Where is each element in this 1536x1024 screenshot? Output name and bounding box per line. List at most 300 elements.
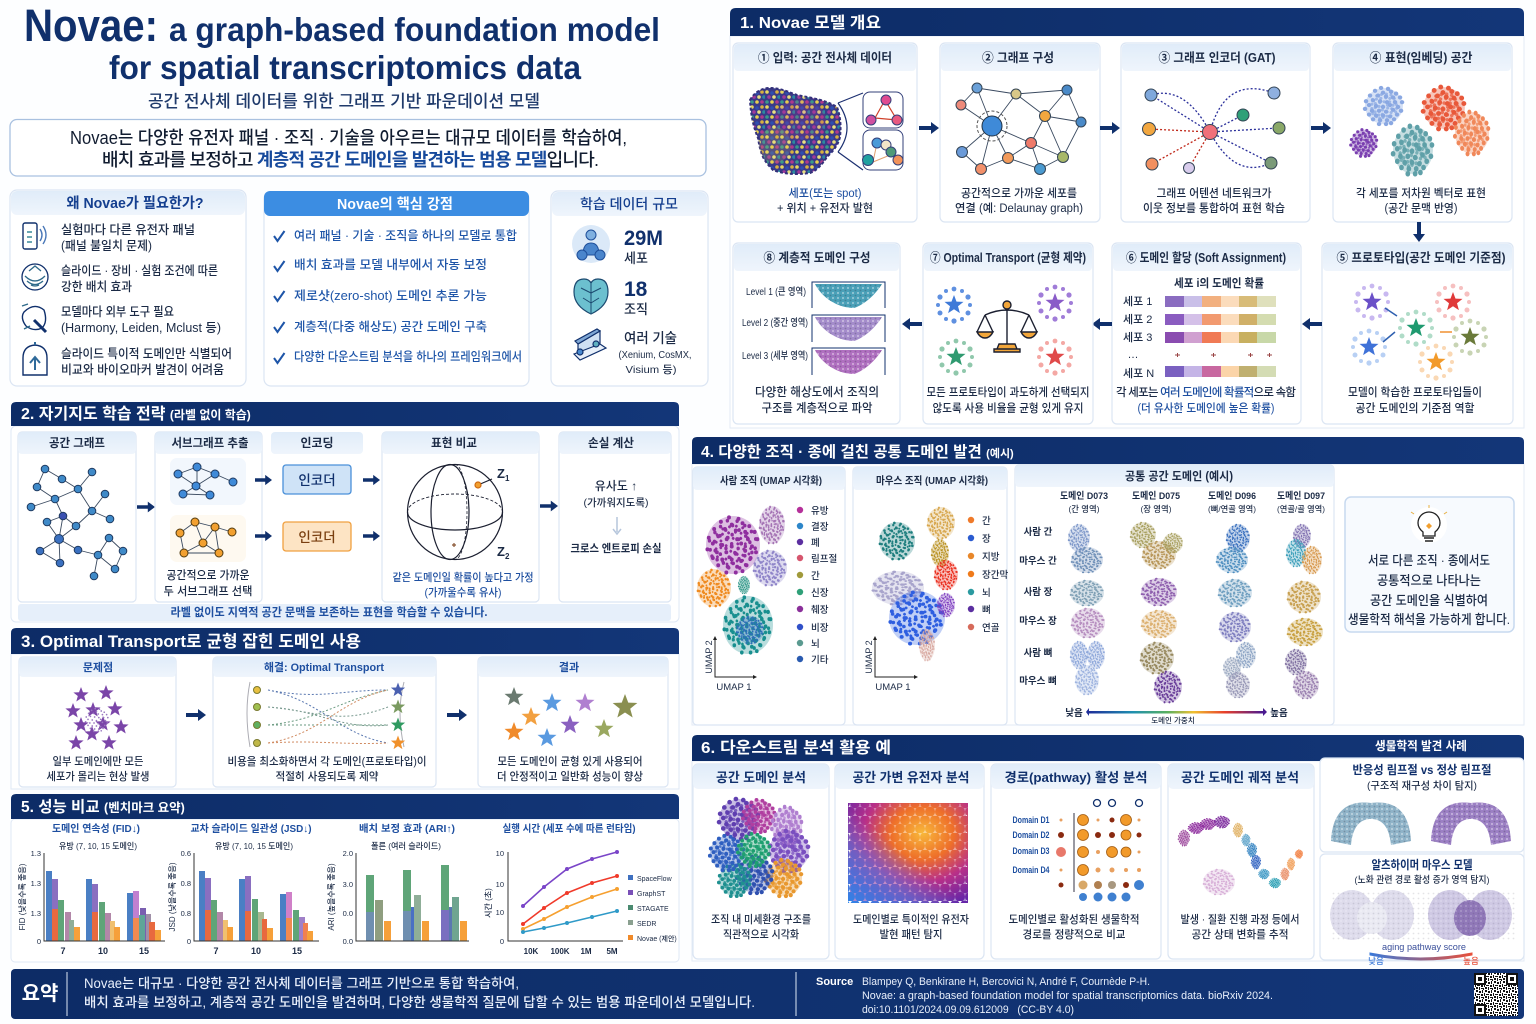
legend: STAGATE [637,906,669,913]
column heads [1060,490,1325,514]
title: for spatial transcriptomics data [109,49,582,86]
step 4: embedding: (공간 문맥 반영) [1384,202,1458,215]
card: pathway activity [991,764,1161,959]
chart: JSD: JSD (낮을수록 좋음) [167,862,177,932]
chart: ARI: ARI (높을수록 좋음) [327,863,336,931]
card: mouse UMAP: 마우스 조직 (UMAP 시각화) [876,474,988,487]
checklist: 여러 패널 · 기술 · 조직을 하나의 모델로 통합 [294,228,517,243]
chart: runtime lines: 0 [500,937,504,946]
legend: SEDR [637,921,656,928]
scatter [697,506,787,654]
legend: 간 [811,571,820,582]
callout: shared domains meaning [1345,497,1514,632]
arrow [186,709,206,721]
step 1: input: 세포(또는 spot) [788,187,862,200]
step 2: graph construction: 공간적으로 가까운 세포를 [961,187,1077,200]
card: problem: 일부 도메인에만 모든 [52,754,144,768]
dot plot: Domain D3 [1012,846,1050,856]
legend [797,506,837,666]
chart: JSD: 0.6 [181,849,191,858]
card: Alzheimer mouse: (노화 관련 경로 활성 증가 영역 탐지) [1354,874,1490,886]
colour scale [1065,707,1288,725]
card: encoding [271,432,363,551]
callout strip [18,604,671,621]
step 1: input: + 위치 + 유전자 발현 [777,202,873,215]
flower scatter [710,799,809,896]
text: panel mismatch: 실험마다 다른 유전자 패널 [61,222,195,237]
card: pathway activity: 경로(pathway) 활성 분석 [1004,770,1148,785]
callout: shared domains meaning: 공통적으로 나타나는 [1377,573,1481,588]
column heads: (뼈/연골 영역) [1208,504,1256,514]
checklist: 제로샷(zero-shot) 도메인 추론 가능 [294,288,487,303]
summary text [84,976,755,1010]
text: slide specific: 비교와 바이오마커 발견이 어려움 [61,363,224,377]
icon: phone panel [23,223,46,249]
QR code [1474,973,1518,1016]
encoder blue: 인코더 [298,473,336,488]
card: pathway activity: 도메인별로 활성화된 생물학적 [1008,912,1140,926]
card: solution: 해결: Optimal Transport [264,661,384,674]
encoder orange: 인코더 [298,530,336,545]
heading: section 5: 5. 성능 비교 (벤치마크 요약) [21,798,185,816]
card: reactive lymph node [1320,758,1524,852]
text: panel mismatch [61,222,195,253]
legend: SpaceFlow [637,876,673,883]
card: representation comparison: Z [497,466,505,481]
heading: data scale: 학습 데이터 규모 [580,196,678,212]
chart: ARI: 0.0 [343,937,353,946]
card: trajectory [1168,764,1314,959]
icon: balance scale [977,301,1037,352]
card: problem: 세포가 몰리는 현상 발생 [46,770,150,783]
step 2: graph construction [940,43,1100,222]
step 7: optimal transport: 않도록 사용 비율을 균형 있게 유지 [932,401,1084,415]
legend: 뇌 [811,639,820,650]
probability bars [1123,295,1276,380]
card: representation comparison: (가까울수록 유사) [424,586,502,599]
chart: JSD: 유방 (7, 10, 15 도메인) [215,841,293,851]
row labels: 사람 간 [1024,526,1053,538]
card: trajectory: 발생 · 질환 진행 과정 등에서 [1180,913,1300,926]
card: mouse UMAP [853,467,1008,725]
legend: GraphST [637,891,666,898]
heading: section 1: 1. Novae 모델 개요 [740,14,881,32]
chart: ARI [327,822,469,946]
arrows to sphere [363,475,380,541]
title: Novae: [24,0,158,51]
card: shared domains grid: 공통 공간 도메인 (예시) [1125,469,1233,483]
stat: 18 tissues [624,278,648,317]
zoom lines [838,93,863,170]
trajectory scatter [1178,816,1303,895]
probability bars: 세포 3 [1123,331,1152,344]
row labels [1019,526,1057,687]
legend [628,875,677,943]
card: result: 모든 도메인이 균형 있게 사용되어 [498,754,642,768]
summary text: 배치 효과를 보정하고, 계층적 공간 도메인을 발견하며, 다양한 생물학적 질문에 답할 수 있는 범용 파운데이션 모델입니다. [84,994,755,1010]
transport lines [247,682,404,747]
step 2: graph construction: 연결 (예: Delaunay graph) [955,202,1083,215]
inset: neighbour cells [862,92,903,170]
column heads: (간 영역) [1068,504,1100,514]
icon: tissue leaf [574,279,608,314]
legend: 뼈 [982,604,991,616]
step 5: prototypes [1322,243,1513,424]
card: spatially variable genes: 발현 패턴 탐지 [880,928,942,941]
callout strip: 라벨 없이도 지역적 공간 문맥을 보존하는 표현을 학습할 수 있습니다. [170,605,488,619]
legend: 장 [982,533,991,545]
axes [704,636,757,693]
step 7: optimal transport: 모든 프로토타입이 과도하게 선택되지 [926,385,1090,399]
step 6: soft assignment: 세포 i의 도메인 확률 [1174,276,1264,290]
graph nodes [27,465,127,580]
embedding clusters [1351,87,1489,174]
footer: summary and source [11,969,1524,1019]
probability bars: … [1128,349,1138,361]
chart: FID: 유방 (7, 10, 15 도메인) [59,841,137,851]
sphere [408,464,502,560]
legend [968,516,1008,634]
panel: biological discoveries [1320,738,1524,966]
title [24,0,660,86]
card: loss: 유사도 ↑ [595,479,637,493]
column heads: 도메인 D073 [1060,490,1108,502]
card: subgraph extraction [155,432,262,602]
crowded stars [65,685,129,749]
card: problem: 문제점 [83,660,113,674]
source citation: Blampey Q, Benkirane H, Bercovici N, André F, Cournède P-H. [862,976,1150,988]
domain blobs [1068,522,1323,703]
text: batch effect [61,263,218,294]
card: spatially variable genes: 도메인별로 특이적인 유전자 [853,913,969,926]
chart: ARI: 0.0 [343,909,353,918]
card: Alzheimer mouse [1320,854,1524,966]
column heads: 도메인 D096 [1208,490,1256,502]
section 1: model overview [730,8,1524,428]
card: spatially variable genes [835,764,984,959]
colour scale: 높음 [1270,708,1288,719]
level images [742,282,885,375]
card: human UMAP [693,467,845,725]
axes: UMAP 2 [864,640,874,674]
chart: runtime lines: 10 [496,908,504,917]
chart: FID: 10 [98,946,108,956]
section 3: optimal transport [11,628,679,789]
chart: runtime lines: 5M [606,947,618,956]
card: reactive lymph node: 반응성 림프절 vs 정상 림프절 [1352,763,1492,777]
card: representation comparison: 1 [505,474,510,483]
step 8: hierarchical domains: 다양한 해상도에서 조직의 [755,385,879,399]
step 1: input: ① 입력: 공간 전사체 데이터 [758,51,892,65]
legend: 림프절 [811,553,837,565]
step 4: embedding [1333,43,1512,222]
source citation [816,976,1273,1016]
card: encoding: 인코딩 [300,436,334,450]
card: solution: 적절히 사용되도록 제약 [276,769,378,783]
step 3: GAT: ③ 그래프 인코더 (GAT) [1158,50,1276,65]
chart: ARI: 폴른 (여러 슬라이드) [371,841,441,851]
subgraph orange [170,515,246,562]
card: spatially variable genes: 공간 가변 유전자 분석 [852,770,970,785]
step 6: soft assignment [1112,243,1301,424]
chart: JSD: 10 [251,946,261,956]
step 6: soft assignment: ⑥ 도메인 할당 (Soft Assignment) [1126,250,1286,265]
card: spatial domain analysis: 직관적으로 시각화 [723,928,799,941]
step 2: graph construction: ② 그래프 구성 [982,50,1054,65]
chart: FID: 7 [60,946,66,956]
row labels: 사람 장 [1024,586,1053,598]
heading: biological discoveries: 생물학적 발견 사례 [1375,738,1467,753]
text: batch effect: 슬라이드 · 장비 · 실험 조건에 따른 [61,263,218,278]
stat: 29M cells: 29M [624,227,663,250]
card: reactive lymph node: (구조적 재구성 차이 탐지) [1367,779,1477,792]
step 8: hierarchical domains [733,243,900,424]
stat: technologies: (Xenium, CosMX, [618,349,692,361]
card: pathway activity: 경로를 정량적으로 비교 [1022,927,1126,941]
chart: runtime lines: 100K [550,947,570,956]
stat: 29M cells [624,227,663,266]
text: slide specific [61,346,232,377]
aging score scale: aging pathway score [1382,942,1466,952]
arrow 3-4 [1311,122,1331,134]
legend: 결장 [811,521,829,533]
card: subgraph extraction: 서브그래프 추출 [172,435,248,450]
icon: cells people [572,225,610,263]
card: trajectory: 공간 상태 변화를 추적 [1192,928,1288,941]
arrows to encoders [255,475,272,541]
arrow 7-8 [902,318,922,330]
checklist: 다양한 다운스트림 분석을 하나의 프레임워크에서 [294,350,522,364]
section 4: shared domains [692,437,1524,725]
column heads: 도메인 D097 [1277,490,1325,502]
stat: 18 tissues: 18 [624,278,648,301]
heading: why Novae: 왜 Novae가 필요한가? [66,195,204,212]
probability bars: 세포 1 [1123,295,1152,308]
legend: 연골 [982,622,1000,634]
chart: ARI: 2.0 [343,849,353,858]
icon: technologies device [574,329,606,360]
source citation: Source [816,976,853,988]
chart: runtime lines: 실행 시간 (세포 수에 따른 런타임) [502,822,636,835]
summary label: 요약 [22,982,58,1005]
axes: UMAP 2 [704,640,714,674]
row labels: 마우스 뼈 [1019,675,1057,687]
legend: 기타 [811,655,829,666]
card: loss [559,432,671,602]
right stars [391,682,405,749]
chart: FID: 1.3 [31,849,41,858]
heading: section 4: 4. 다양한 조직 · 종에 걸친 공통 도메인 발견 (예시) [701,443,1014,461]
checklist: 계층적(다중 해상도) 공간 도메인 구축 [294,319,487,334]
card: human UMAP: 사람 조직 (UMAP 시각화) [720,474,822,487]
text: external tools: 모델마다 외부 도구 필요 [61,305,174,319]
step 6: soft assignment: 각 세포는 여러 도메인에 확률적으로 속함 [1116,385,1296,399]
step 4: embedding: 각 세포를 저차원 벡터로 표현 [1356,186,1486,200]
card: spatial domain analysis: 조직 내 미세환경 구조를 [711,913,811,926]
card: loss: 크로스 엔트로피 손실 [570,542,662,555]
scatter [872,507,958,661]
card: trajectory: 공간 도메인 궤적 분석 [1181,770,1299,785]
arrow 2-3 [1100,122,1120,134]
prototype stars [936,285,1073,376]
axes: UMAP 1 [716,682,752,693]
card: solution: 비용을 최소화하면서 각 도메인(프로토타입)이 [228,754,426,768]
chart: JSD: 7 [213,946,219,956]
balanced stars [504,687,637,746]
arrow 1-2 [919,122,939,134]
aging score scale: 높음 [1463,956,1479,966]
tissue scatter [750,88,841,174]
intro statement box: Novae는 다양한 유전자 패널 · 조직 · 기술을 아우르는 대규모 데이터를 학습하여, [70,128,627,148]
chart: runtime lines: 10 [496,849,504,858]
step 3: GAT: 그래프 어텐션 네트워크가 [1156,187,1272,200]
column heads: 도메인 D075 [1132,490,1181,502]
checklist: 배치 효과를 모델 내부에서 자동 보정 [294,258,487,272]
chart: JSD: 0.8 [181,909,191,918]
step 5: prototypes: 공간 도메인의 기준점 역할 [1356,401,1475,415]
step 4: embedding: ④ 표현(임베딩) 공간 [1370,50,1473,65]
card: representation comparison: 표현 비교 [431,435,477,450]
card: solution [213,657,436,787]
step 8: hierarchical domains: 구조를 계층적으로 파악 [762,401,872,415]
prototype stars [1351,284,1488,381]
chart: JSD: 교차 슬라이드 일관성 (JSD↓) [190,822,312,835]
heading: section 6: 6. 다운스트림 분석 활용 예 [701,739,891,757]
chart: runtime lines: 시간 (초) [483,888,493,918]
card: problem [19,657,176,787]
row labels: 사람 뼈 [1024,647,1052,659]
chart: JSD: 15 [292,946,302,956]
probability bars: 세포 N [1123,367,1154,380]
attention network [1142,87,1285,174]
icon: light bulb [1411,505,1447,543]
probability bars: 세포 2 [1123,313,1152,326]
legend: 지방 [982,552,1000,563]
stat: 29M cells: 세포 [624,251,648,266]
dot plot: Domain D1 [1012,815,1050,825]
subtitle: 공간 전사체 데이터를 위한 그래프 기반 파운데이션 모델 [148,92,540,111]
step 5: prototypes: 모델이 학습한 프로토타입들이 [1348,386,1482,399]
chart: FID: 1.3 [31,909,41,918]
step 8: hierarchical domains: ⑧ 계층적 도메인 구성 [764,250,870,265]
stat: technologies: Visium 등) [626,364,676,376]
dot plot [1012,800,1144,902]
chart: FID [17,822,165,956]
panel: why Novae [10,190,246,386]
stat: 18 tissues: 조직 [624,302,648,317]
text: panel mismatch: (패널 불일치 문제) [61,239,152,253]
dot plot: Domain D2 [1012,830,1050,840]
legend: 비장 [811,622,829,634]
step 6: soft assignment: (더 유사한 도메인에 높은 확률) [1138,402,1275,415]
graph [956,83,1086,174]
heading: section 2: 2. 자기지도 학습 전략 (라벨 없이 학습) [21,405,251,423]
text: external tools: (Harmony, Leiden, Mclust 등) [61,321,221,335]
hex heatmap [848,803,968,903]
arrow 4-5 [1413,222,1425,242]
chart: FID: FID (낮을수록 좋음) [17,863,27,930]
column heads: (장 영역) [1140,504,1172,514]
row labels: 마우스 간 [1019,556,1057,567]
card: representation comparison: 같은 도메인일 확률이 높다고 가정 [392,570,534,584]
heading: section 3: 3. Optimal Transport로 균형 잡힌 도메인 사용 [21,632,361,651]
colour scale: 도메인 가중치 [1151,715,1195,725]
step 3: GAT [1121,43,1310,222]
arrow down [613,517,621,534]
intro statement box [10,120,706,176]
axes: UMAP 1 [875,682,911,693]
chart: ARI: 3.0 [343,880,353,889]
legend: 유방 [811,506,829,517]
legend: 신장 [811,587,829,599]
step 3: GAT: 이웃 정보를 통합하여 표현 학습 [1143,201,1285,215]
card: representation comparison: 2 [505,552,510,561]
arrow 6-7 [1092,318,1112,330]
card: representation comparison: Z [497,544,505,559]
chart: ARI: 배치 보정 효과 (ARI↑) [359,822,455,835]
card: spatial domain analysis: 공간 도메인 분석 [716,770,806,785]
subgraph blue [170,458,246,505]
intro statement box: 배치 효과를 보정하고 계층적 공간 도메인을 발견하는 범용 모델입니다. [102,150,599,170]
stat: technologies: 여러 기술 [624,330,677,346]
icon: external tool [22,304,46,332]
step 7: optimal transport [923,243,1093,424]
level images: Level 2 (중간 영역) [742,316,808,329]
arrow [447,709,467,721]
aging score scale: 낮음 [1368,956,1384,966]
legend: 간 [982,516,991,527]
chart: FID: 15 [139,946,149,956]
colour scale: 낮음 [1065,707,1083,719]
card: subgraph extraction: 공간적으로 가까운 [166,569,250,582]
arrow 5-6 [1302,318,1322,330]
card: spatial domain analysis [693,764,829,959]
chart: FID: 0 [37,937,41,946]
chart: runtime lines: 10K [524,947,539,956]
source citation: Novae: a graph-based foundation model for spatial transcriptomics data. bioRxiv 2024. [862,990,1273,1002]
text: external tools [61,305,221,335]
level images: Level 1 (큰 영역) [746,285,806,298]
card: Alzheimer mouse: 알츠하이머 마우스 모델 [1372,858,1472,872]
axes [864,636,918,693]
card: loss: (가까워지도록) [584,496,648,509]
callout: shared domains meaning: 생물학적 해석을 가능하게 합니다. [1348,612,1510,627]
title: a graph-based foundation model [169,11,660,48]
aging score scale [1368,942,1479,966]
legend: 폐 [811,537,820,549]
legend: Novae (제안) [637,934,677,943]
legend: 뇌 [982,588,991,599]
icon: batch effect [22,264,48,290]
chart: JSD: 0 [187,937,191,946]
chart: runtime lines: 10 [496,880,504,889]
legend: 췌장 [811,604,829,616]
arrow [137,502,155,512]
text: batch effect: 강한 배치 효과 [61,280,132,294]
column heads: (연골/골 영역) [1277,504,1325,514]
card: shared domains grid [1015,465,1334,725]
dot plot: Domain D4 [1012,865,1050,875]
card: result: 더 안정적이고 일반화 성능이 향상 [497,769,643,783]
summary text: Novae는 대규모 · 다양한 공간 전사체 데이터를 그래프 기반으로 통합 학습하여, [84,976,519,991]
checklist [274,228,522,364]
chart: FID: 도메인 연속성 (FID↓) [52,822,140,835]
legend: 장간막 [982,569,1008,581]
level images: Level 3 (세부 영역) [742,349,808,362]
card: spatial graph [18,432,136,602]
stat: technologies [618,330,692,376]
arrow [540,501,558,511]
